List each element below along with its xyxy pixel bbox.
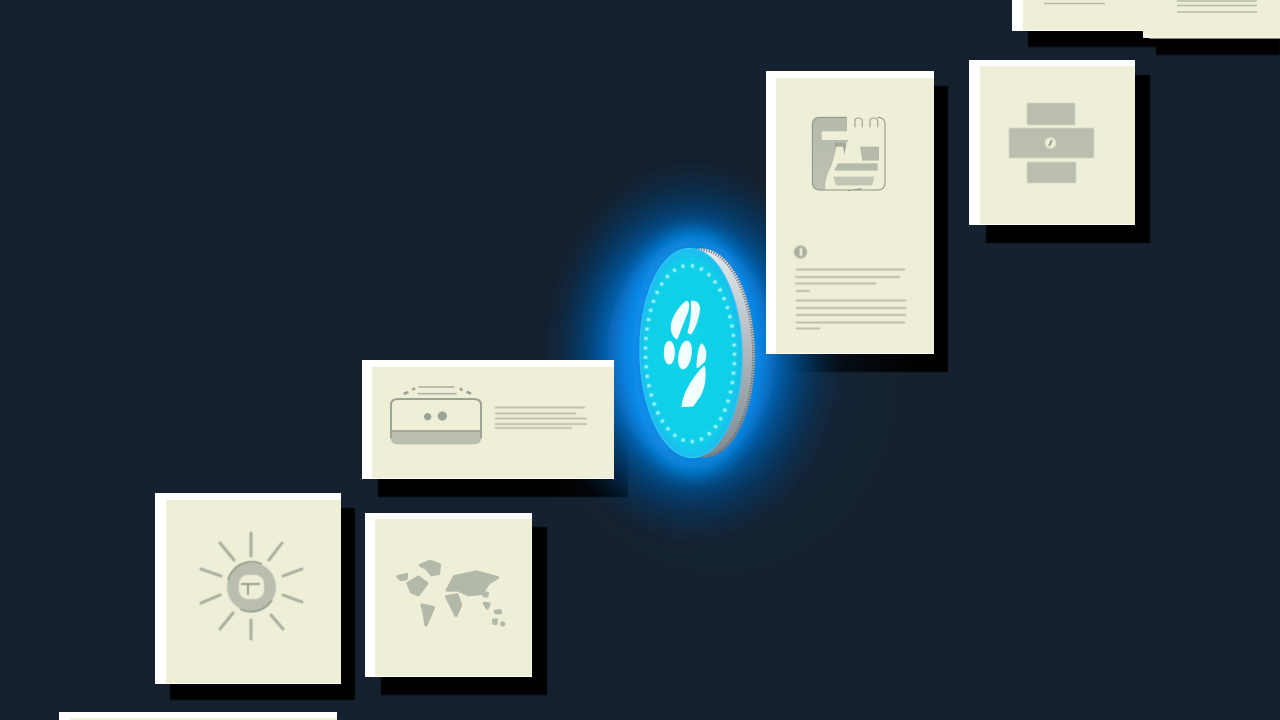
coin dotted ring: [644, 265, 736, 442]
text lines: [795, 270, 906, 328]
icon: small info circle: [794, 246, 807, 258]
card: wide device: [362, 360, 614, 479]
icon: document symbol: [812, 117, 885, 191]
coin face: [638, 248, 744, 458]
icon: device: [391, 387, 481, 444]
icon: sun disc: [227, 562, 276, 612]
icon: world map: [398, 561, 504, 625]
card: bottom strip: [59, 712, 337, 720]
coin logo: [665, 302, 705, 406]
card: top right right piece: [1143, 0, 1280, 38]
coin glow: [520, 160, 920, 600]
icon: cross: [1009, 103, 1094, 183]
coin edge: [649, 248, 757, 458]
coin: [638, 248, 757, 458]
card: tall document: [766, 71, 934, 354]
card: sun: [155, 493, 341, 684]
icon: sun rays: [201, 533, 302, 639]
card: top right left piece: [1012, 0, 1145, 31]
card: world map: [365, 513, 532, 677]
card: cross symbol: [969, 60, 1135, 225]
text lines: [495, 408, 587, 428]
